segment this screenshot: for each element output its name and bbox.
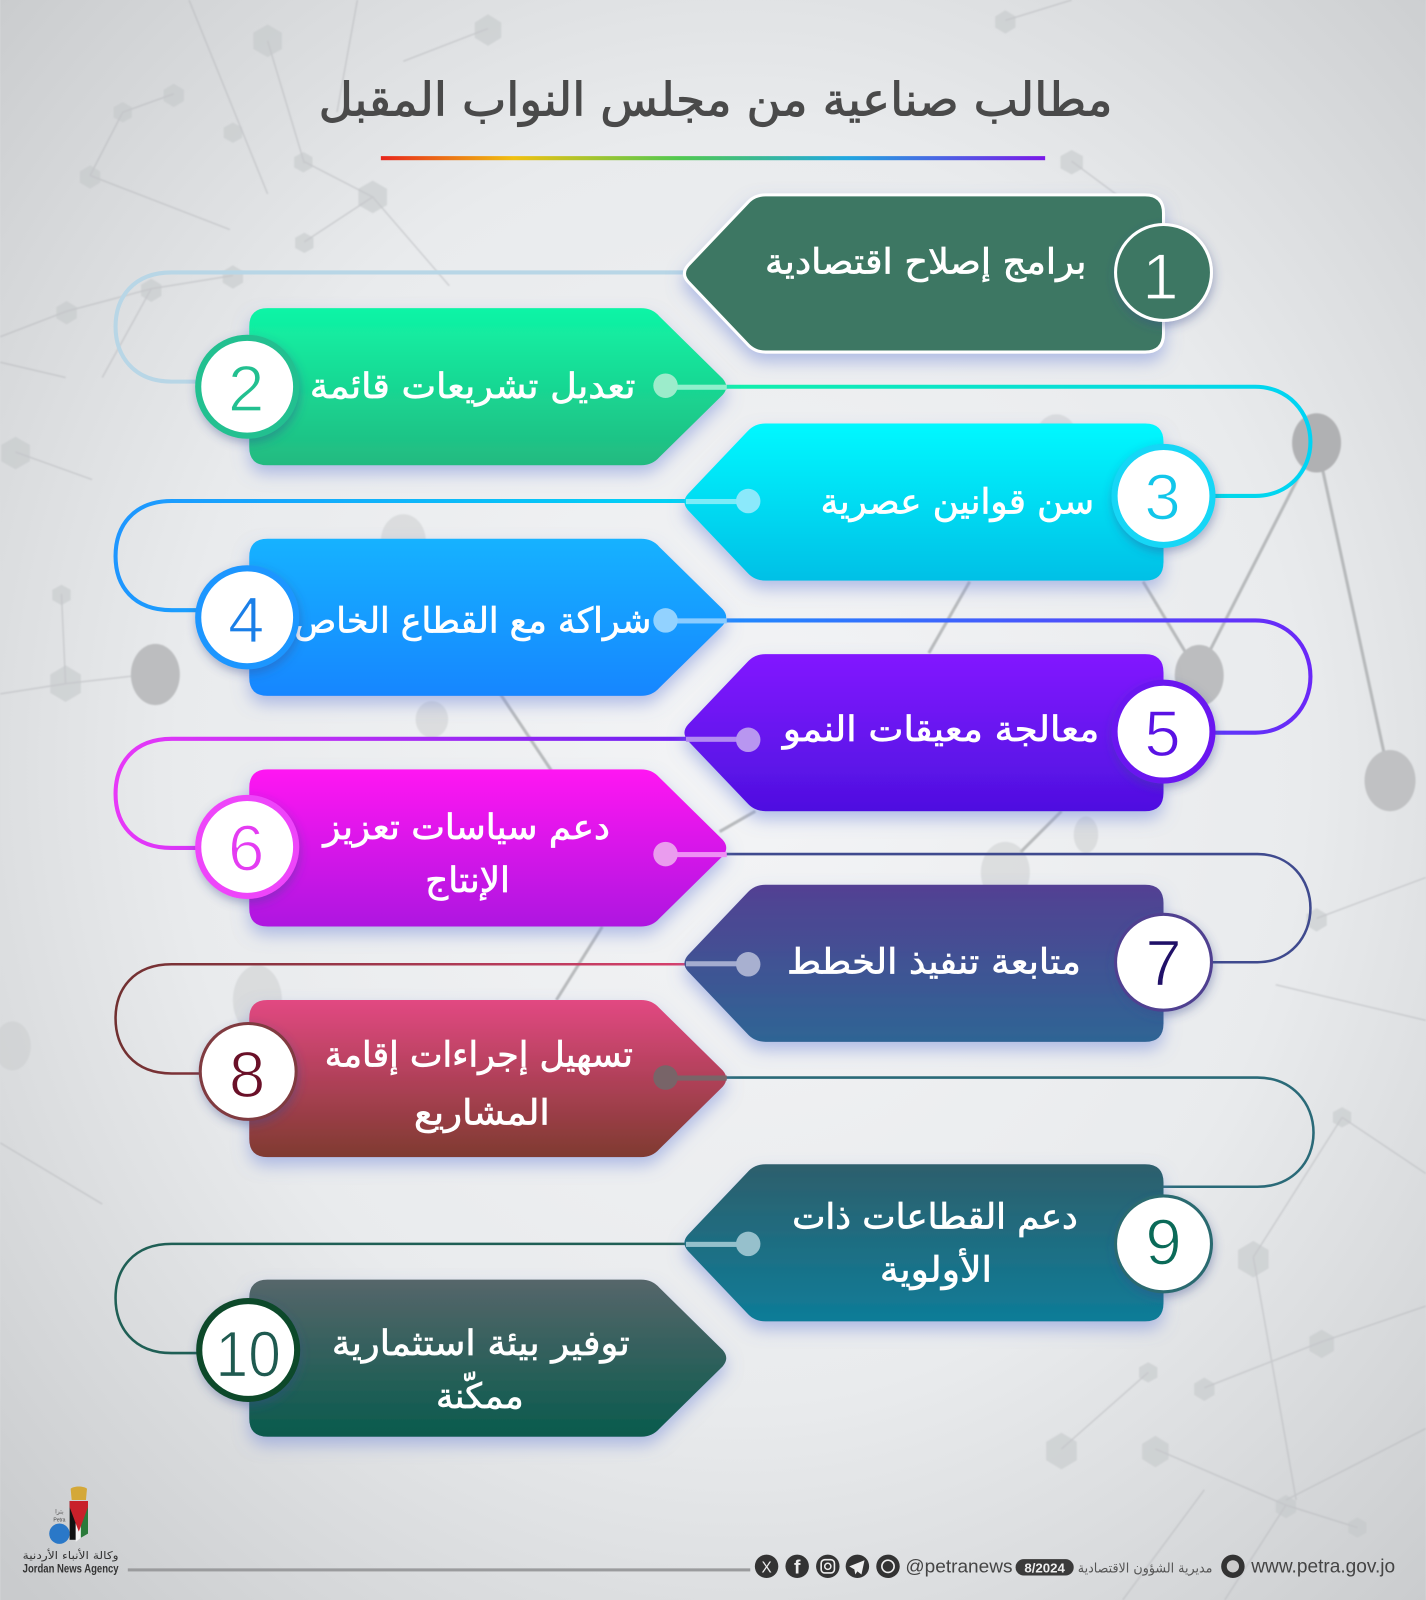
item 3 — [684, 423, 1212, 581]
item 1 — [684, 195, 1211, 352]
logo: Jordan News Agency: وكالة الأنباء الأردنية — [23, 1548, 119, 1562]
item 7: متابعة تنفيذ الخطط — [787, 942, 1081, 982]
social icons: X — [761, 1559, 772, 1576]
item 9: دعم القطاعات ذات — [792, 1198, 1078, 1238]
logo: Jordan News Agency — [23, 1486, 119, 1575]
item 8: تسهيل إجراءات إقامة — [325, 1035, 633, 1075]
item 8: 8 — [229, 1038, 265, 1111]
item 8: المشاريع — [414, 1093, 550, 1133]
item 5: 5 — [1144, 697, 1181, 770]
item 5 — [684, 654, 1212, 811]
item 4: شراكة مع القطاع الخاص — [294, 602, 651, 642]
item 2: 2 — [228, 352, 264, 425]
title: مطالب صناعية من مجلس النواب المقبل — [319, 72, 1112, 127]
item 2: تعديل تشريعات قائمة — [310, 367, 635, 407]
logo: Jordan News Agency: Petra — [53, 1517, 66, 1523]
item 10: 10 — [216, 1318, 281, 1391]
item 4 — [198, 539, 727, 696]
item 7 — [684, 885, 1211, 1042]
item 6: 6 — [228, 811, 264, 884]
social icons: f — [794, 1556, 801, 1578]
item 8 — [200, 1000, 727, 1157]
footer rule — [128, 1568, 750, 1571]
item 9 — [684, 1164, 1211, 1321]
item 4: 4 — [228, 583, 264, 656]
item 2 — [198, 308, 727, 465]
item 1: 1 — [1142, 240, 1179, 313]
item 9: الأولوية — [880, 1248, 992, 1291]
rainbow underline — [381, 156, 1045, 160]
item 10 — [199, 1280, 726, 1437]
item 3: سن قوانين عصرية — [821, 482, 1094, 522]
date pill — [1016, 1559, 1074, 1576]
website: www.petra.gov.jo — [1250, 1555, 1395, 1577]
social handle: @petranews — [905, 1555, 1012, 1576]
logo: Jordan News Agency: بترا — [55, 1508, 64, 1515]
item 6 — [198, 769, 727, 927]
item 10: توفير بيئة استثمارية — [332, 1324, 630, 1364]
social icons — [755, 1555, 900, 1578]
item 3: 3 — [1144, 460, 1181, 533]
item 1: برامج إصلاح اقتصادية — [765, 242, 1086, 282]
date pill: 8/2024 — [1024, 1560, 1066, 1575]
department text: مديرية الشؤون الاقتصادية — [1078, 1561, 1212, 1576]
item 5: معالجة معيقات النمو — [781, 710, 1099, 750]
connector lines — [116, 272, 1314, 1353]
item 10: ممكّنة — [436, 1371, 524, 1417]
logo: Jordan News Agency: Jordan News Agency — [23, 1561, 119, 1575]
item 6: دعم سياسات تعزيز — [321, 808, 610, 848]
item 7: 7 — [1145, 927, 1182, 1000]
item 6: الإنتاج — [425, 861, 510, 901]
item 9: 9 — [1145, 1205, 1182, 1278]
icon: globe — [1221, 1555, 1245, 1578]
